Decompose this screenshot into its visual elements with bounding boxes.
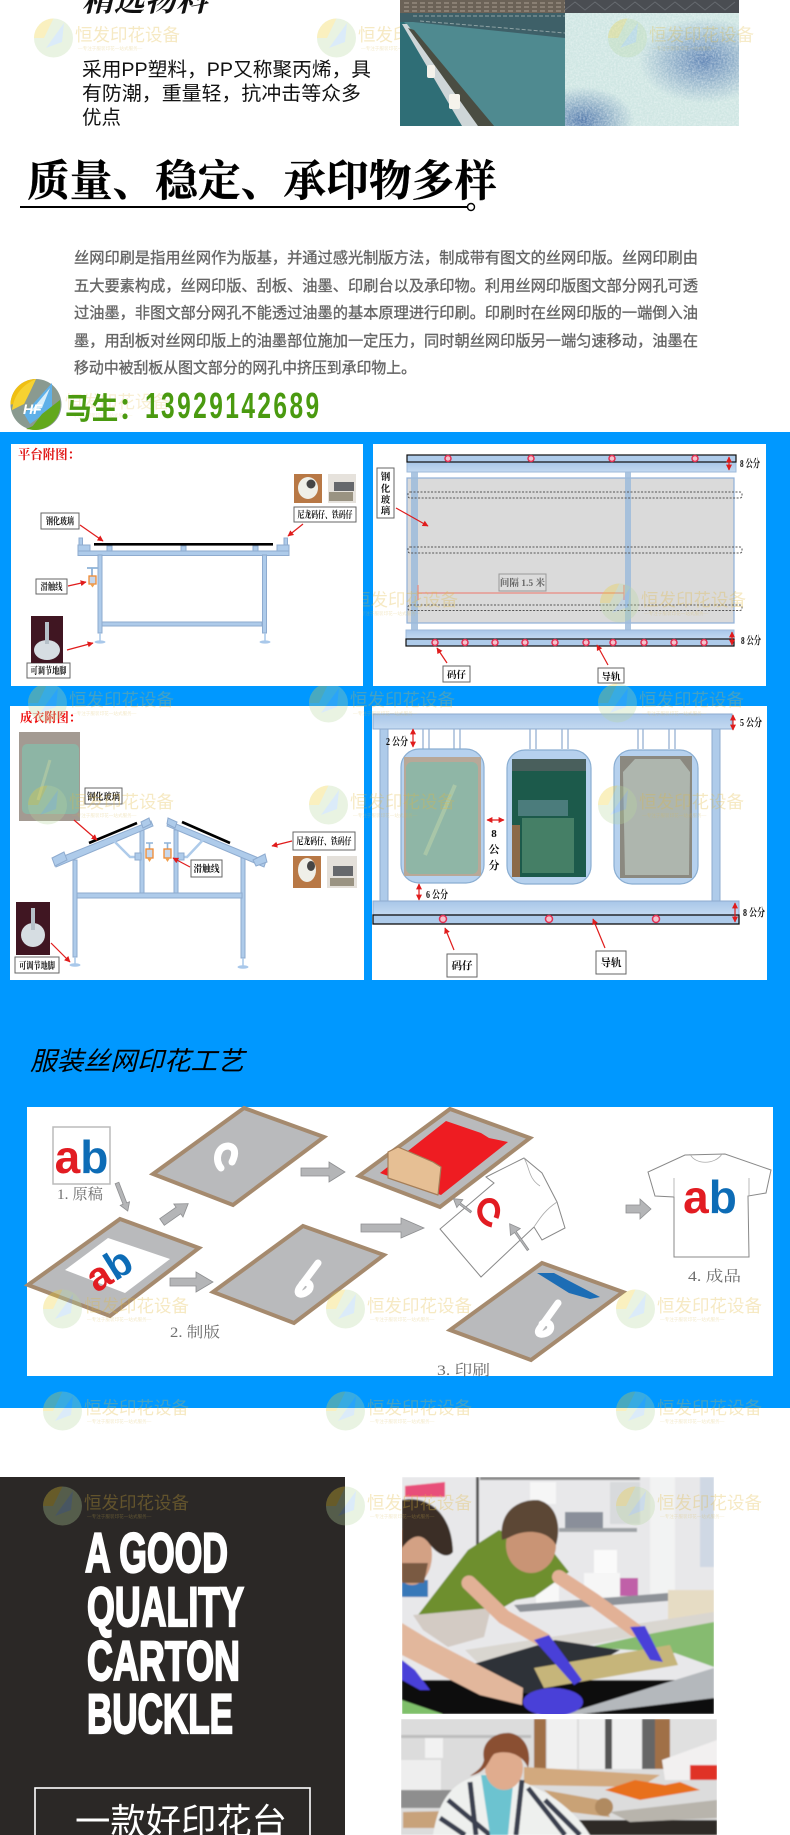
label: tempered glass: 钢化玻璃 bbox=[46, 516, 74, 528]
tempered glass bar bbox=[94, 543, 273, 546]
watermark row 3c: 恒发印花设备 bbox=[639, 690, 744, 710]
tempered glass bars bbox=[89, 822, 230, 843]
watermark row 7a: —专注于服装印花一站式服务— bbox=[87, 1513, 152, 1520]
spacing line bbox=[418, 585, 624, 600]
label: step 2: 2. 制版 bbox=[170, 1324, 220, 1341]
frame with b-stencil bbox=[213, 1226, 384, 1323]
watermark row 6a: —专注于服装印花一站式服务— bbox=[87, 1418, 152, 1425]
watermark row 5a: 恒发印花设备 bbox=[84, 1296, 189, 1316]
label: step 4: 4. 成品 bbox=[688, 1268, 741, 1285]
label: nylon and iron clamps bbox=[293, 832, 355, 850]
watermark row 6c: 恒发印花设备 bbox=[657, 1398, 762, 1418]
icon: company logo: HF bbox=[23, 401, 42, 417]
watermark row 3a: —专注于服装印花一站式服务— bbox=[72, 710, 137, 717]
panel: dark quality slogan bbox=[0, 1477, 345, 1835]
watermark row 7c bbox=[616, 1486, 762, 1526]
watermark row 4a: —专注于服装印花一站式服务— bbox=[72, 812, 137, 819]
watermark row 7b: —专注于服装印花一站式服务— bbox=[370, 1513, 435, 1520]
dimension: 2 cm: 2 公分 bbox=[386, 734, 408, 748]
photo: adjustable foot bbox=[16, 902, 50, 955]
dimension: 8 cm: 8 公分 bbox=[743, 905, 765, 919]
label: nylon and iron clamps: 尼龙码仔、铁码仔 bbox=[296, 836, 352, 848]
panel: garment platform top view bbox=[372, 706, 767, 980]
label: clamp: 码仔 bbox=[452, 959, 473, 972]
watermark row 3c: —专注于服装印花一站式服务— bbox=[642, 710, 707, 717]
watermark row 5a bbox=[43, 1290, 189, 1328]
frame with a-stencil bbox=[153, 1108, 324, 1205]
frame with artwork bbox=[28, 1219, 199, 1316]
label: tempered glass (vertical): 玻 bbox=[381, 494, 391, 506]
watermark row 7c: 恒发印花设备 bbox=[657, 1493, 762, 1513]
watermark row 5b: —专注于服装印花一站式服务— bbox=[370, 1316, 435, 1323]
label: clamp bbox=[443, 666, 470, 682]
watermark row 3a: 恒发印花设备 bbox=[69, 690, 174, 710]
heading underline with end dot bbox=[20, 204, 474, 210]
dashed guide lines bbox=[408, 492, 742, 610]
text: contact phone bbox=[65, 385, 322, 426]
label: guide rail: 导轨 bbox=[600, 956, 622, 969]
text: material description: 采用PP塑料，PP又称聚丙烯，具 bbox=[82, 59, 371, 81]
watermark row 3b: 恒发印花设备 bbox=[350, 690, 455, 710]
text: screen printing explanation: 墨，用刮板对丝网印版上的油墨部位施加一定压力，同时朝丝网印版另一端匀速移动，油墨在 bbox=[74, 332, 698, 350]
dimension: 8 cm vertical: 公 bbox=[488, 843, 500, 856]
watermark row 2a: —专注于服装印花一站式服务— bbox=[356, 610, 421, 617]
watermark row 4c: —专注于服装印花一站式服务— bbox=[642, 812, 707, 819]
watermark row 7c: —专注于服装印花一站式服务— bbox=[660, 1513, 725, 1520]
watermark row 7a bbox=[43, 1486, 189, 1526]
top photo: dark roof strip bbox=[400, 0, 739, 13]
watermark behind contact line: —专注于服装印花一站式服务— bbox=[68, 412, 133, 419]
text: screen printing explanation: 移动中被刮板从图文部分的网孔中挤压到承印物上。 bbox=[74, 359, 416, 377]
watermark layer bbox=[28, 18, 762, 1526]
glass panel 3 bbox=[614, 750, 698, 884]
watermark row 6b: 恒发印花设备 bbox=[367, 1398, 472, 1418]
label: sliding wire bbox=[191, 860, 222, 877]
text: screen printing explanation: 五大要素构成，丝网印版、刮板、油墨、印刷台以及承印物。利用丝网印版图文部分网孔可透 bbox=[74, 277, 698, 295]
red arrows bbox=[67, 524, 303, 650]
step 1: original artwork: ab bbox=[55, 1131, 108, 1183]
label: step 3: 3. 印刷 bbox=[437, 1362, 490, 1379]
watermark row 3a bbox=[28, 684, 174, 722]
lower rail bbox=[406, 630, 734, 646]
dimension: 5 cm: 5 公分 bbox=[740, 715, 762, 729]
frame with red ink and squeegee bbox=[359, 1109, 530, 1207]
label: adjustable foot: 可调节地脚 bbox=[30, 665, 67, 677]
label: sliding wire bbox=[36, 579, 67, 594]
text: contact phone: 13929142689 bbox=[145, 385, 322, 426]
dimension: 8 cm vertical bbox=[488, 828, 500, 872]
panel: garment platform side view bbox=[10, 706, 364, 980]
finished t-shirt bbox=[648, 1154, 771, 1257]
blue background band bbox=[0, 432, 790, 1408]
label: clamp bbox=[447, 954, 477, 977]
photo: adjustable foot bbox=[31, 616, 63, 663]
watermark row 6c: —专注于服装印花一站式服务— bbox=[660, 1418, 725, 1425]
photo: clamp rollers bbox=[293, 856, 357, 888]
label: sliding wire: 滑触线 bbox=[194, 863, 220, 875]
watermark row 1c: 恒发印花设备 bbox=[649, 25, 754, 45]
photo: clamp rollers bbox=[294, 474, 356, 503]
label: adjustable foot bbox=[27, 663, 70, 678]
spacing label bbox=[499, 574, 546, 591]
glass panel 1 bbox=[401, 749, 484, 883]
label: adjustable foot bbox=[15, 957, 59, 973]
watermark row 4c: 恒发印花设备 bbox=[639, 792, 744, 812]
watermark row 5a: —专注于服装印花一站式服务— bbox=[87, 1316, 152, 1323]
text: material description: 优点 bbox=[82, 107, 121, 129]
heading: garment screen printing process: 服装丝网印花工艺 bbox=[30, 1046, 247, 1076]
finished t-shirt: ab bbox=[683, 1171, 737, 1223]
text: material description bbox=[82, 59, 371, 129]
label: guide rail bbox=[598, 668, 624, 683]
photo: frosted glass texture bbox=[565, 13, 739, 126]
label: tempered glass (vertical): 钢 bbox=[381, 471, 391, 483]
watermark row 5c: 恒发印花设备 bbox=[657, 1296, 762, 1316]
icon: company logo bbox=[10, 379, 62, 430]
label: step 1: 1. 原稿 bbox=[57, 1185, 103, 1203]
heading: quality, stability, varied substrates: 质量、稳定、承印物多样 bbox=[27, 158, 497, 206]
watermark row 6b bbox=[326, 1392, 472, 1430]
watermark row 2a: 恒发印花设备 bbox=[353, 590, 458, 610]
watermark row 3b bbox=[309, 684, 455, 722]
watermark row 1c: —专注于服装印花一站式服务— bbox=[652, 45, 717, 52]
top bar and legs bbox=[373, 714, 732, 901]
watermark row 6a: 恒发印花设备 bbox=[84, 1398, 189, 1418]
heading: platform diagram: 平台附图： bbox=[18, 447, 80, 462]
watermark row 7b bbox=[326, 1486, 472, 1526]
glass sheet bbox=[407, 478, 734, 623]
label: tempered glass (vertical): 璃 bbox=[381, 505, 391, 517]
glass panel 2 bbox=[507, 750, 591, 884]
watermark row 4b bbox=[309, 786, 455, 824]
panel: process diagram (garment screen printing) bbox=[27, 1107, 773, 1379]
text: contact phone: 马生： bbox=[65, 393, 145, 426]
watermark row 3c bbox=[598, 684, 744, 722]
printed t-shirt in progress bbox=[440, 1158, 565, 1277]
dimension text: top: 8 公分 bbox=[740, 456, 760, 470]
watermark row 7b: 恒发印花设备 bbox=[367, 1493, 472, 1513]
photo: teal printing table bbox=[400, 13, 565, 126]
watermark row 2b: 恒发印花设备 bbox=[641, 590, 746, 610]
dimension: 8 cm vertical: 分 bbox=[488, 858, 500, 872]
watermark row 5c: —专注于服装印花一站式服务— bbox=[660, 1316, 725, 1323]
red arrows bbox=[51, 820, 292, 962]
photo: glass pane bbox=[19, 732, 80, 821]
watermark row 1b: 恒发印花设备 bbox=[358, 25, 463, 45]
watermark row 2b: —专注于服装印花一站式服务— bbox=[644, 610, 709, 617]
label: tempered glass (vertical) bbox=[377, 468, 394, 518]
watermark row 2b bbox=[600, 584, 746, 622]
watermark row 5c bbox=[616, 1290, 762, 1328]
photo: woman at work table bbox=[401, 1719, 717, 1835]
dimension: 6 cm: 6 公分 bbox=[426, 887, 448, 901]
watermark row 1a: —专注于服装印花一站式服务— bbox=[78, 45, 143, 52]
heading: garment diagram: 成衣附图： bbox=[20, 710, 81, 725]
support bars bbox=[411, 472, 631, 630]
text: screen printing explanation: 过油墨，非图文部分网孔不能透过油墨的基本原理进行印刷。印刷时在丝网印版的一端倒入油 bbox=[74, 305, 698, 322]
watermark row 3b: —专注于服装印花一站式服务— bbox=[353, 710, 418, 717]
watermark row 1c bbox=[608, 18, 754, 58]
panel: top view of platform bbox=[373, 444, 766, 686]
label: tempered glass bbox=[41, 513, 79, 529]
watermark row 4b: 恒发印花设备 bbox=[350, 792, 455, 812]
process arrows bbox=[112, 1162, 651, 1292]
slogan text: A GOOD QUALITY CARTON BUCKLE: BUCKLE bbox=[87, 1682, 233, 1745]
slogan text: A GOOD QUALITY CARTON BUCKLE: A GOOD bbox=[85, 1521, 228, 1584]
label: sliding wire: 滑触线 bbox=[40, 581, 63, 593]
label: adjustable foot: 可调节地脚 bbox=[19, 960, 55, 972]
frame with blue ink bbox=[450, 1263, 623, 1360]
watermark row 6b: —专注于服装印花一站式服务— bbox=[370, 1418, 435, 1425]
watermark row 4b: —专注于服装印花一站式服务— bbox=[353, 812, 418, 819]
text: material description: 有防潮，重量轻，抗冲击等众多 bbox=[82, 83, 361, 105]
label: tempered glass (vertical): 化 bbox=[381, 483, 391, 495]
slogan text: A GOOD QUALITY CARTON BUCKLE: QUALITY bbox=[87, 1575, 244, 1638]
dimension text: bottom: 8 公分 bbox=[741, 633, 761, 647]
watermark row 4a bbox=[28, 786, 174, 824]
dimension: 8 cm vertical: 8 bbox=[491, 828, 497, 840]
watermark row 6c bbox=[616, 1392, 762, 1430]
frame with artwork: ab bbox=[78, 1239, 141, 1301]
watermark row 6a bbox=[43, 1392, 189, 1430]
watermark row 4a: 恒发印花设备 bbox=[69, 792, 174, 812]
bottom bar and rail bbox=[373, 901, 739, 924]
slogan text: A GOOD QUALITY CARTON BUCKLE bbox=[85, 1521, 244, 1745]
label: clamp: 码仔 bbox=[447, 669, 466, 681]
sliding contact wires bbox=[146, 843, 171, 862]
arrows and dimensions bbox=[396, 457, 732, 665]
label: tempered glass: 钢化玻璃 bbox=[87, 791, 120, 803]
spacing label: 间隔 1.5 米 bbox=[500, 577, 546, 589]
label: tempered glass bbox=[85, 788, 122, 804]
watermark row 7a: 恒发印花设备 bbox=[84, 1493, 189, 1513]
label: nylon and iron clamps bbox=[294, 507, 356, 522]
watermark behind contact line: 恒发印花设备 bbox=[65, 392, 170, 412]
label: nylon and iron clamps: 尼龙码仔、铁码仔 bbox=[298, 509, 353, 521]
text: screen printing explanation: 丝网印刷是指用丝网作为版基，并通过感光制版方法，制成带有图文的丝网印版。丝网印刷由 bbox=[74, 250, 698, 267]
watermark row 5b bbox=[326, 1290, 472, 1328]
sliding contact wire bbox=[87, 568, 98, 588]
table frame bbox=[78, 538, 289, 644]
frame structure bbox=[52, 818, 267, 969]
label: guide rail: 导轨 bbox=[601, 671, 621, 683]
watermark row 1b: —专注于服装印花一站式服务— bbox=[361, 45, 426, 52]
dimension arrows bbox=[413, 715, 735, 950]
watermark row 5b: 恒发印花设备 bbox=[367, 1296, 472, 1316]
label: guide rail bbox=[596, 951, 626, 974]
photo: worker screen printing bbox=[392, 1477, 714, 1716]
panel: platform side view bbox=[11, 444, 363, 686]
watermark row 1b bbox=[317, 18, 463, 58]
slogan text: A GOOD QUALITY CARTON BUCKLE: CARTON bbox=[87, 1629, 240, 1692]
outlined slogan box bbox=[35, 1788, 310, 1835]
watermark row 1a bbox=[34, 18, 180, 58]
upper rail bbox=[407, 455, 736, 472]
text: screen printing explanation bbox=[74, 250, 698, 377]
watermark row 1a: 恒发印花设备 bbox=[75, 25, 180, 45]
watermark row 4c bbox=[598, 786, 744, 824]
